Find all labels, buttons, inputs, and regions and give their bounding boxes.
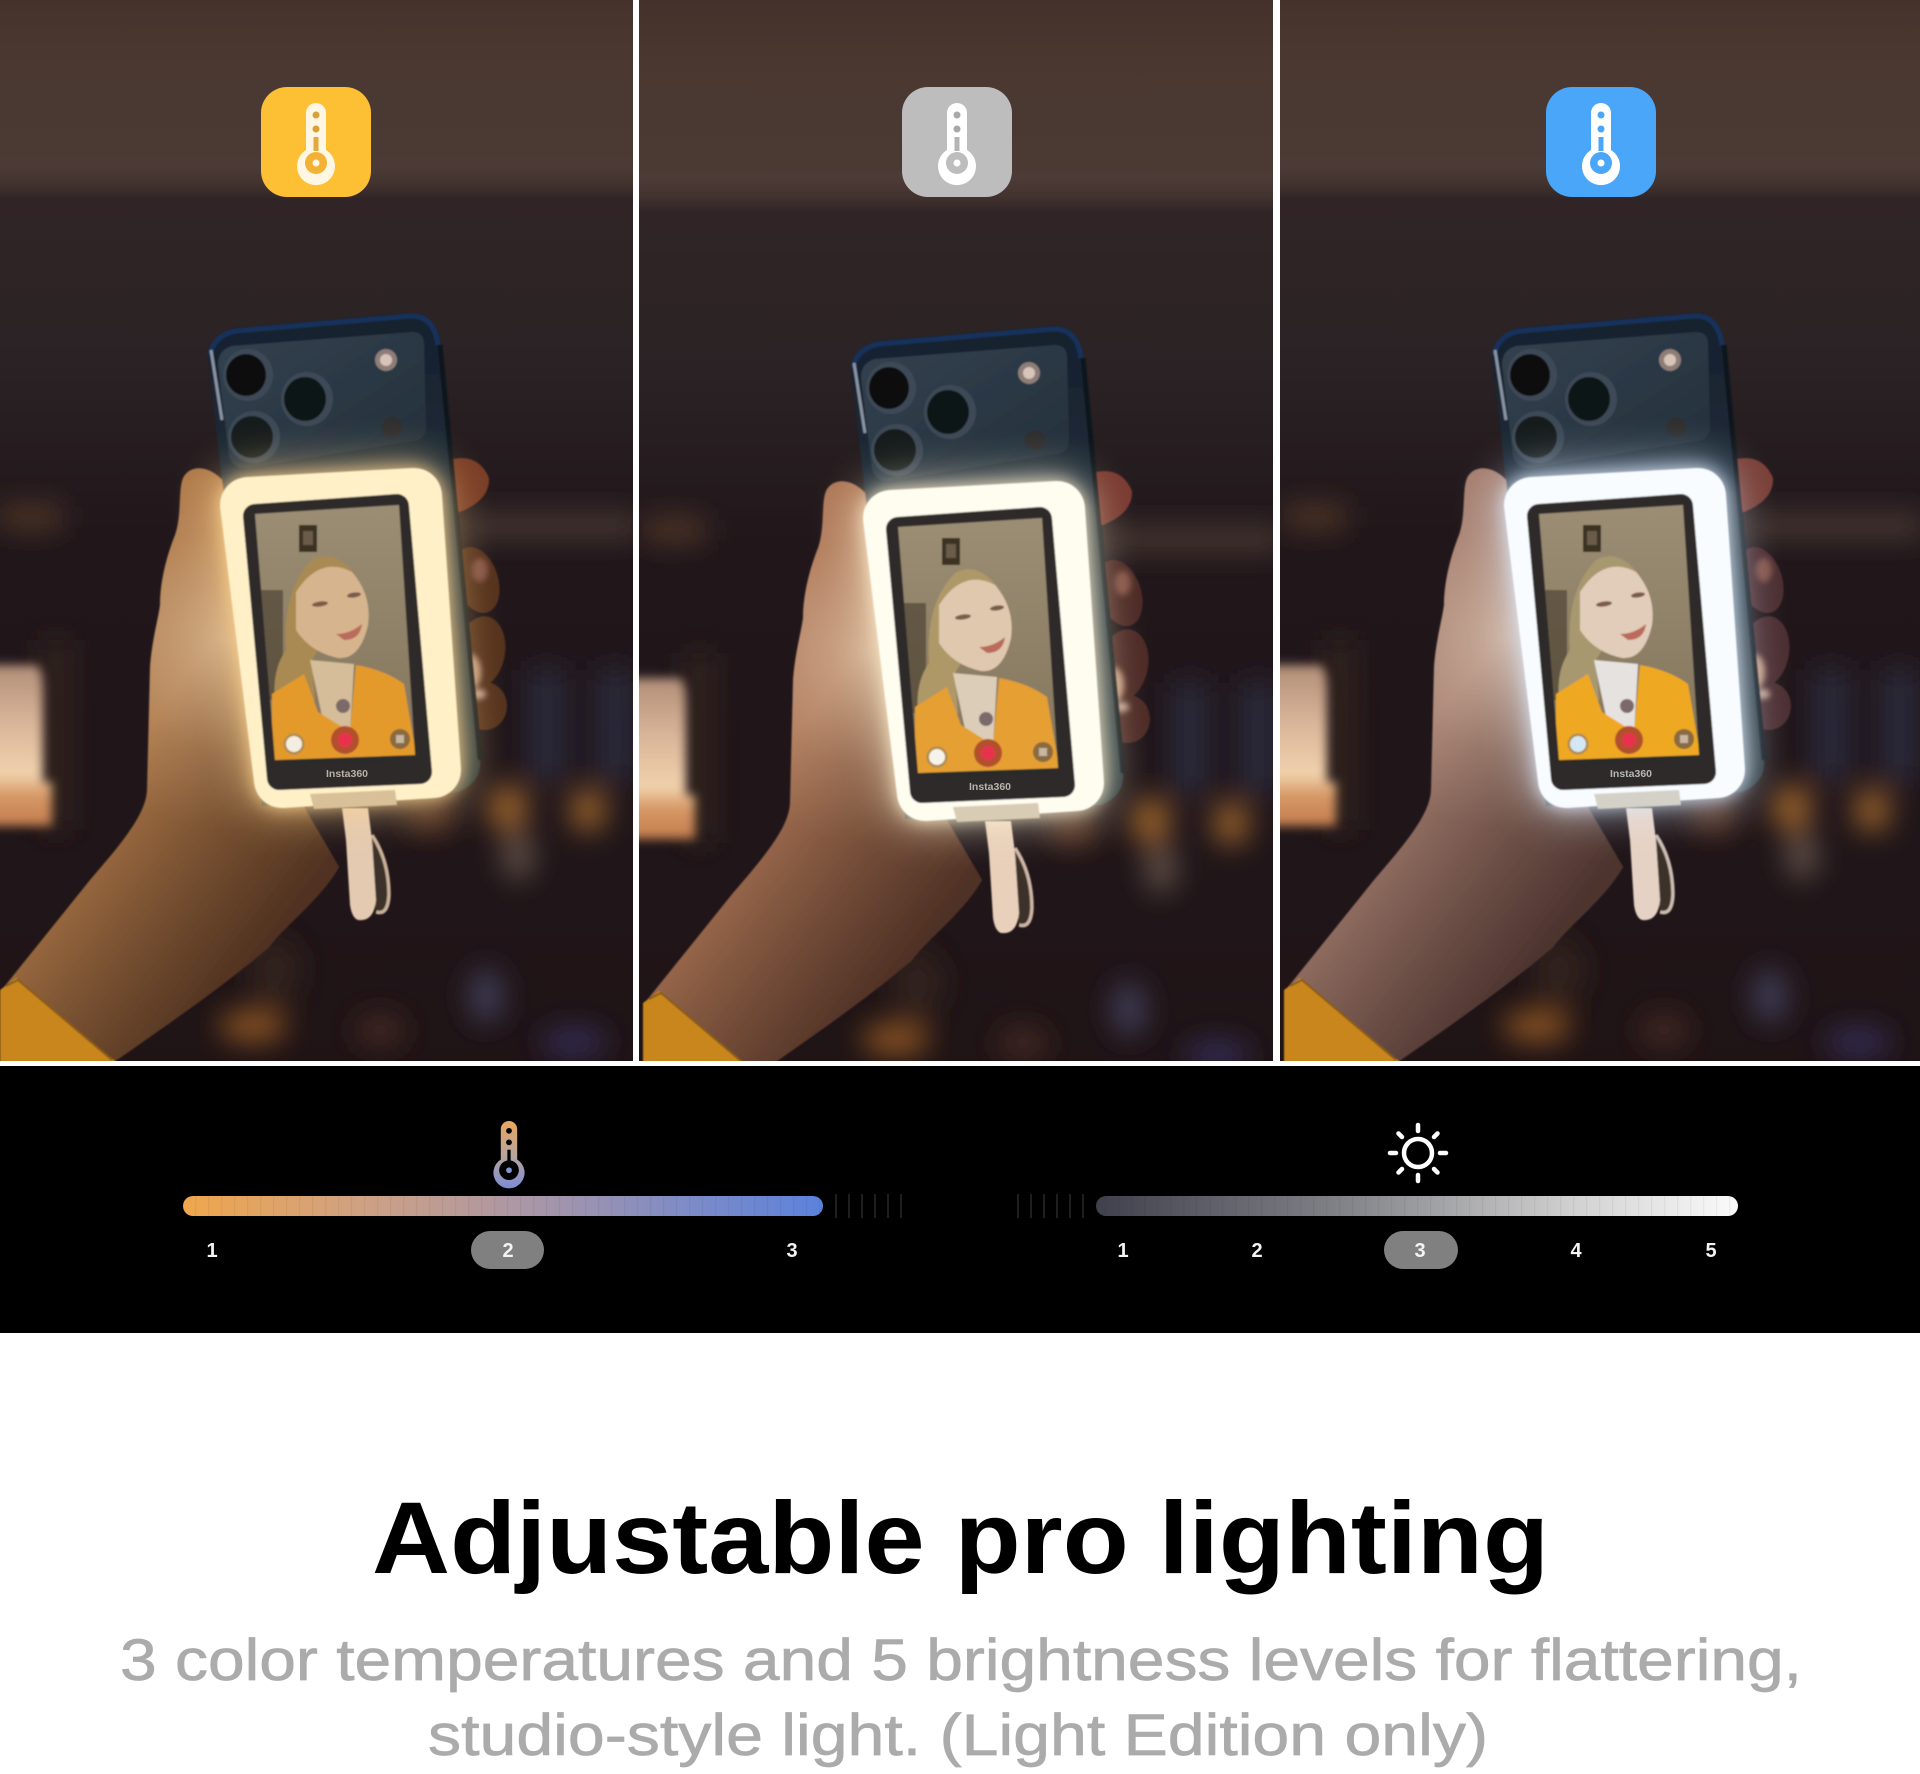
photo: phone with cool light ring held in hand [1264, 0, 1920, 1080]
icon: gradient thermometer [493, 1121, 525, 1188]
bar: temperature gradient [183, 1196, 823, 1216]
icon: sun [1390, 1125, 1446, 1181]
text: device logo: Insta360 [969, 781, 1011, 793]
labels: temperature levels: 2 [502, 1240, 514, 1262]
labels: brightness levels: 5 [1705, 1240, 1717, 1262]
labels: brightness levels: 2 [1251, 1240, 1263, 1262]
photo: phone with warm light ring held in hand [0, 0, 680, 1080]
labels: brightness levels: 4 [1570, 1240, 1582, 1262]
pill: selected brightness [1384, 1231, 1458, 1269]
slider: brightness [1018, 1125, 1738, 1269]
text: device logo: Insta360 [326, 768, 368, 780]
text block: description [120, 1628, 1802, 1768]
slider: color temperature [183, 1121, 901, 1269]
labels: brightness levels: 1 [1117, 1240, 1129, 1262]
text: device logo: Insta360 [1610, 768, 1652, 780]
panel: cool light photo [1264, 0, 1920, 1080]
text block: description: studio-style light. (Light Edition only) [428, 1703, 1488, 1768]
panel: neutral light photo [639, 0, 1273, 1061]
photo: phone with neutral light ring held in hand [639, 0, 1273, 1061]
icon: neutral temperature badge [902, 87, 1012, 197]
labels: temperature levels: 1 [206, 1240, 218, 1262]
panel: warm light photo [0, 0, 680, 1080]
icon: warm temperature badge [261, 87, 371, 197]
panel: control strip [0, 1066, 1920, 1333]
labels: temperature levels: 3 [786, 1240, 798, 1262]
pill: selected temperature [471, 1231, 544, 1269]
text block: description: 3 color temperatures and 5 brightness levels for flattering, [120, 1628, 1802, 1693]
labels: brightness levels: 3 [1414, 1240, 1426, 1262]
heading: Adjustable pro lighting [372, 1481, 1549, 1595]
bar: brightness gradient [1096, 1196, 1738, 1216]
labels: temperature levels [206, 1240, 798, 1262]
labels: brightness levels [1117, 1240, 1717, 1262]
icon: cool temperature badge [1546, 87, 1656, 197]
